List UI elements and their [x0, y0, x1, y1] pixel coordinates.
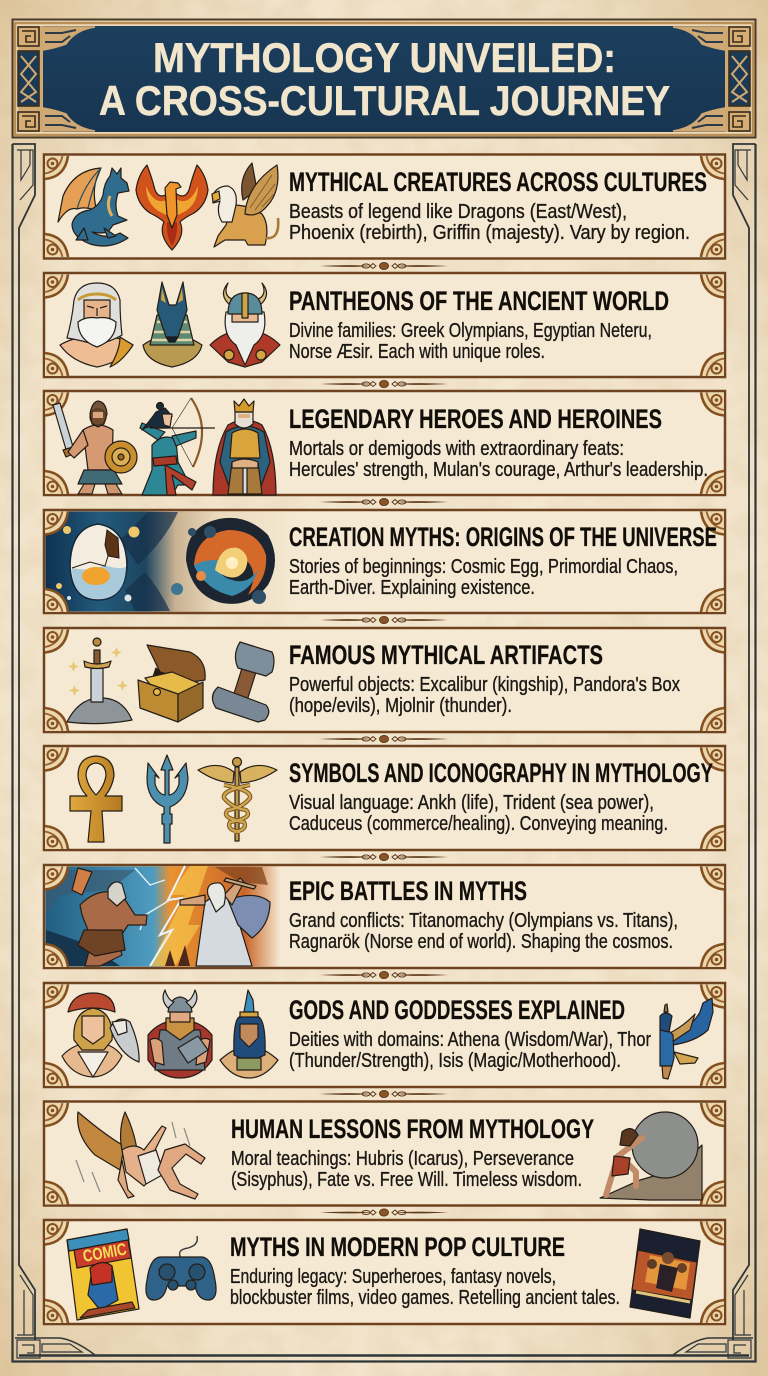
icon: Athena with owl: [62, 993, 139, 1077]
description: Powerful objects: Excalibur (kingship), Pandora's Box: [289, 674, 680, 696]
figure: titan: [72, 868, 147, 966]
divider: [320, 1209, 448, 1216]
description: [230, 1266, 620, 1309]
panel: mythical creatures: [44, 154, 725, 258]
description: Grand conflicts: Titanomachy (Olympians vs. Titans),: [289, 910, 678, 932]
description: [289, 438, 708, 481]
heading: GODS AND GODDESSES EXPLAINED: [289, 995, 625, 1025]
description: [289, 556, 678, 599]
description: [289, 674, 680, 717]
icon: game controller: [146, 1236, 216, 1300]
description: Divine families: Greek Olympians, Egyptian Neteru,: [289, 320, 652, 342]
icon: dragon: [58, 168, 129, 246]
header banner: [12, 20, 756, 138]
description: (Sisyphus), Fate vs. Free Will. Timeless wisdom.: [231, 1169, 582, 1191]
description: Phoenix (rebirth), Griffin (majesty). Vary by region.: [289, 222, 690, 244]
description: Earth-Diver. Explaining existence.: [289, 577, 535, 599]
divider: [320, 498, 448, 506]
divider: [320, 262, 448, 270]
icon: caduceus: [198, 758, 277, 841]
divider: [320, 736, 448, 742]
description: (Thunder/Strength), Isis (Magic/Motherhood).: [289, 1050, 621, 1072]
icon: Anubis: [143, 282, 202, 367]
description: Beasts of legend like Dragons (East/West),: [289, 201, 627, 223]
icon: winged Isis: [660, 998, 713, 1079]
panel: human lessons: [44, 1102, 725, 1206]
icon: Arthur: [213, 399, 276, 495]
icon: Excalibur: [67, 638, 132, 724]
description: Caduceus (commerce/healing). Conveying meaning.: [289, 813, 668, 835]
panel: epic battles: [44, 865, 725, 968]
header ornament: right knot panel: [673, 27, 750, 131]
description: [289, 910, 678, 953]
description: [289, 320, 652, 363]
description: Enduring legacy: Superheroes, fantasy novels,: [230, 1266, 556, 1288]
divider: [320, 380, 448, 388]
panel: pantheons: [44, 273, 725, 377]
icon: movie poster: [630, 1229, 700, 1318]
description: [289, 792, 668, 835]
icon: comic book: [67, 1229, 139, 1320]
icon: ankh: [70, 756, 122, 842]
icon: Pandora's box: [138, 645, 205, 722]
title: [99, 34, 670, 124]
heading: EPIC BATTLES IN MYTHS: [289, 876, 527, 906]
panel: heroes: [44, 391, 725, 495]
icon: phoenix: [136, 165, 208, 250]
header ornament: left knot panel: [18, 27, 95, 131]
title: A CROSS-CULTURAL JOURNEY: [99, 77, 670, 124]
panel: artifacts: [44, 628, 725, 732]
figure: robed god: [180, 878, 270, 966]
description: Moral teachings: Hubris (Icarus), Perseverance: [231, 1148, 574, 1170]
icon: Isis: [220, 990, 278, 1078]
description: Stories of beginnings: Cosmic Egg, Primordial Chaos,: [289, 556, 678, 578]
description: Visual language: Ankh (life), Trident (sea power),: [289, 792, 654, 814]
icon: Mjolnir: [212, 642, 274, 722]
divider: [320, 854, 448, 860]
description: (hope/evils), Mjolnir (thunder).: [289, 695, 512, 717]
icon: Thor: [148, 990, 212, 1078]
divider: [320, 1090, 448, 1098]
illustration: titan and Norse god clash: [45, 866, 280, 966]
title: MYTHOLOGY UNVEILED:: [153, 34, 616, 81]
icon: falling Icarus: [76, 1112, 205, 1199]
icon: trident: [147, 755, 188, 843]
description: [289, 201, 690, 244]
heading: MYTHS IN MODERN POP CULTURE: [230, 1232, 565, 1262]
panel: pop culture: [44, 1220, 725, 1324]
description: [231, 1148, 582, 1191]
description: Deities with domains: Athena (Wisdom/War), Thor: [289, 1029, 651, 1051]
description: blockbuster films, video games. Retelling ancient tales.: [230, 1287, 620, 1309]
icon: comic book: COMIC: [81, 1240, 128, 1266]
icon: Norse god: [210, 283, 280, 367]
heading: HUMAN LESSONS FROM MYTHOLOGY: [231, 1114, 594, 1144]
icon: Mulan: [140, 398, 215, 495]
description: Ragnarök (Norse end of world). Shaping the cosmos.: [289, 931, 673, 953]
panel: gods and goddesses: [44, 983, 725, 1087]
icon: Sisyphus: [600, 1112, 702, 1200]
divider: [320, 616, 448, 624]
icon: Hercules: [53, 401, 137, 494]
icon: griffin: [212, 163, 278, 247]
description: Mortals or demigods with extraordinary feats:: [289, 438, 624, 460]
illustration: cosmic egg and chaos: [46, 512, 296, 612]
description: Norse Æsir. Each with unique roles.: [289, 341, 545, 363]
panel: creation myths: [44, 510, 725, 613]
icon: Zeus: [60, 283, 133, 367]
description: [289, 1029, 651, 1072]
divider: [320, 972, 448, 978]
heading: FAMOUS MYTHICAL ARTIFACTS: [289, 640, 603, 670]
panel: symbols: [44, 746, 725, 850]
